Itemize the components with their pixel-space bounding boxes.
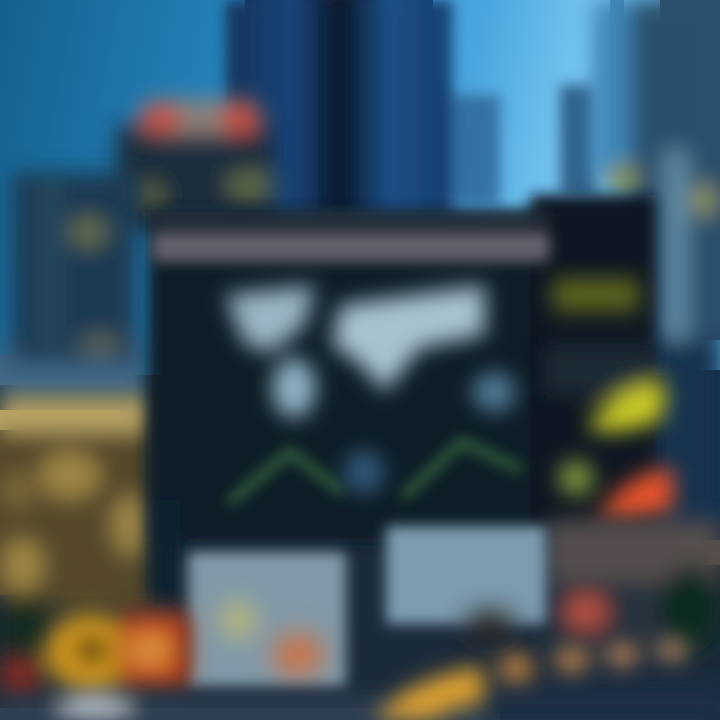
- right side ads: [545, 278, 673, 520]
- gold building bottom left: [0, 396, 150, 660]
- left building: [0, 172, 150, 400]
- ad: yellow badge: [588, 382, 666, 432]
- map: north america: [225, 285, 315, 352]
- ad: olive bar: [552, 278, 640, 312]
- lower right storefront: [548, 520, 720, 654]
- road light streaks: [375, 638, 688, 720]
- right buildings: [592, 0, 720, 540]
- green chart lines: [232, 442, 518, 500]
- world map: [225, 285, 516, 418]
- road: [0, 682, 720, 720]
- dark lower base: [0, 375, 720, 720]
- street signs bottom left: [0, 612, 190, 695]
- billboard title bar: [152, 212, 550, 262]
- ad: gray mid panel: [545, 345, 655, 395]
- center blue dot: [344, 450, 384, 494]
- lower panel left: [188, 552, 346, 687]
- billboard dark panel: [148, 195, 655, 600]
- ad: orange badge: [598, 468, 673, 520]
- map: eurasia: [332, 285, 485, 392]
- lower panel right: [386, 526, 546, 641]
- central tower: [226, 0, 596, 220]
- map: south america: [272, 358, 316, 418]
- rooftop building with colored sign: [116, 100, 274, 230]
- ad: green circle: [558, 460, 594, 496]
- map: australia: [472, 372, 516, 412]
